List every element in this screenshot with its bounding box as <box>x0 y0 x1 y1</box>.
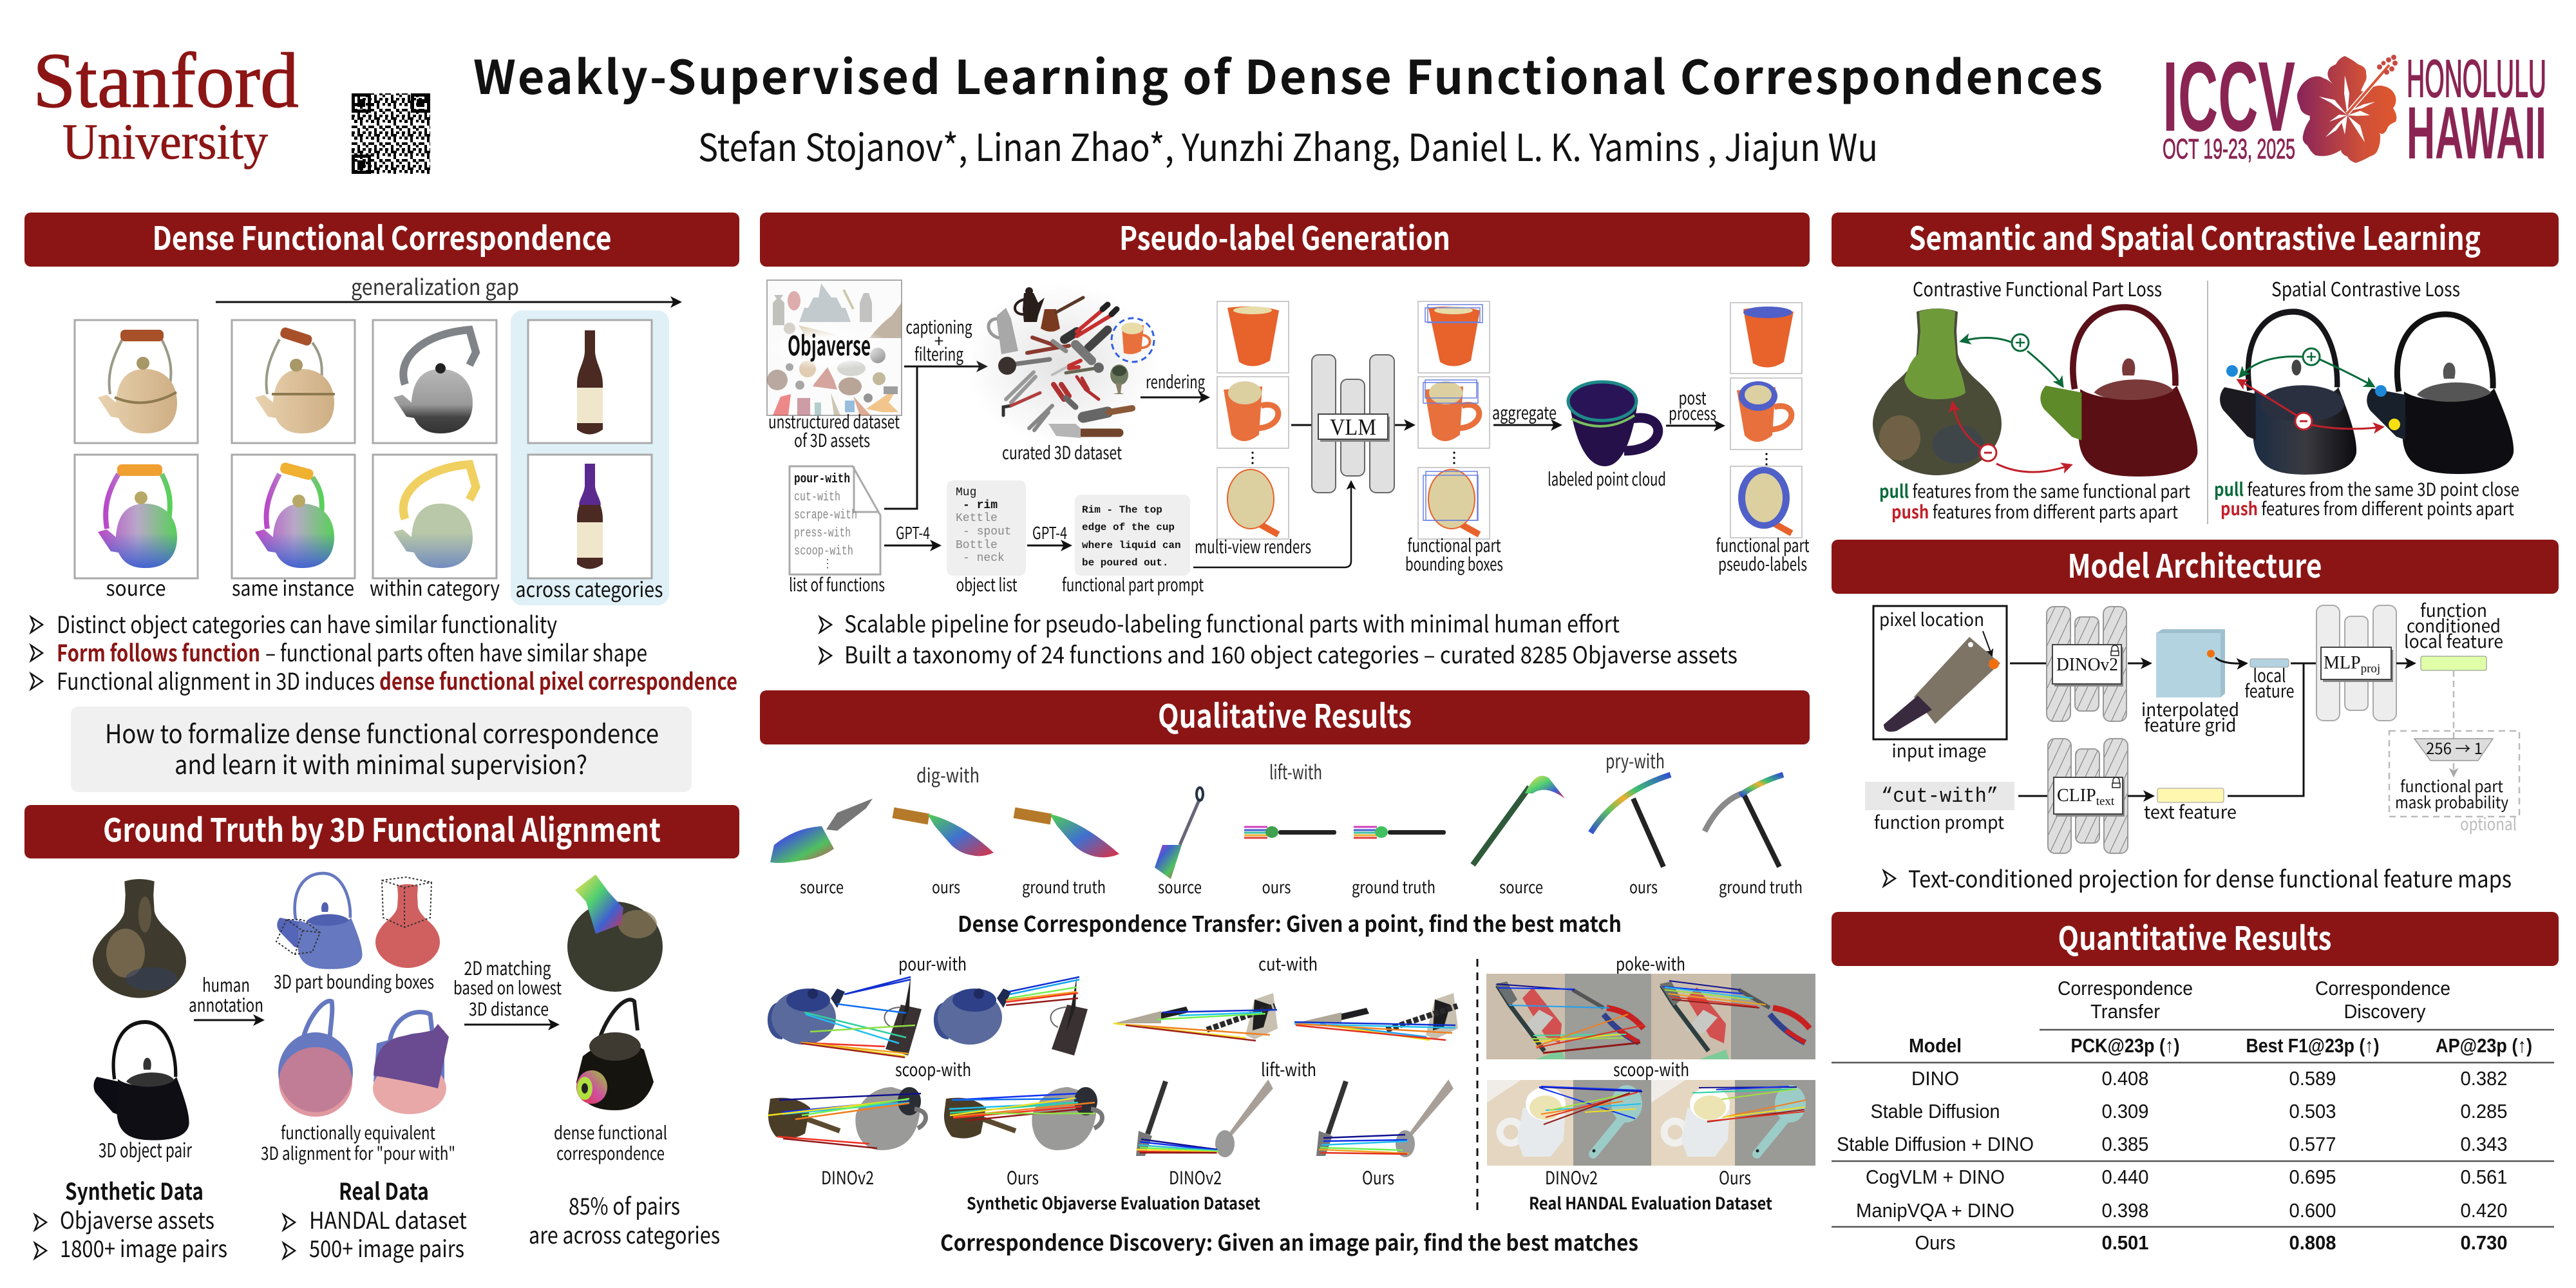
dense transfer: pry-with <box>1473 746 1803 898</box>
captioning and filtering arrow: + <box>934 328 943 352</box>
image column labels <box>106 573 663 603</box>
panel: Ground Truth by 3D Functional Alignment <box>24 805 739 1264</box>
interpolated feature grid: feature grid <box>2145 712 2236 737</box>
MLP projection: MLP <box>2324 653 2361 673</box>
image column labels: across categories <box>515 574 663 603</box>
functional part prompt: be poured out. <box>1082 557 1168 569</box>
results table: 0.503 <box>2289 1100 2336 1122</box>
dataset separator <box>1476 959 1479 1211</box>
dense transfer: pry-with: pry-with <box>1605 746 1665 774</box>
discovery model labels: Ours <box>1362 1164 1394 1190</box>
captioning and filtering arrow: captioning <box>905 314 972 339</box>
85 percent callout: 85% of pairs <box>569 1188 680 1222</box>
real data: HANDAL dataset <box>309 1202 467 1236</box>
optional mask head: mask probability <box>2395 790 2508 813</box>
results table: Stable Diffusion <box>1870 1100 2000 1122</box>
question callout <box>71 706 692 792</box>
heading: Pseudo-label Generation <box>1119 213 1450 260</box>
dense transfer: lift-with: lift-with <box>1269 757 1322 785</box>
synthetic data: Objaverse assets <box>60 1202 214 1236</box>
list of functions document: press-with <box>794 526 851 541</box>
spatial contrastive loss <box>2214 274 2519 521</box>
object list: - rim <box>963 499 998 512</box>
Objaverse collage: Objaverse <box>788 325 871 364</box>
label: unstructured dataset: unstructured dataset <box>768 408 900 434</box>
panel: Qualitative Results <box>760 690 1815 1257</box>
discovery: lift-with <box>1136 1056 1452 1157</box>
real pair: scoop-with: scoop-with <box>1613 1056 1689 1082</box>
dataset labels <box>967 1191 1772 1215</box>
image column labels: within category <box>370 573 500 602</box>
heading <box>1832 540 2559 594</box>
discovery model labels: Ours <box>1719 1164 1751 1190</box>
results table: 0.309 <box>2102 1100 2148 1122</box>
bullet list: – functional parts often have similar shape <box>265 635 647 668</box>
results table: 0.440 <box>2102 1166 2148 1188</box>
discovery: cut-with: cut-with <box>1258 951 1318 976</box>
list of functions document: scoop-with <box>794 544 853 559</box>
panel: Semantic and Spatial Contrastive Learning <box>1832 213 2559 524</box>
ICCV logo: OCT 19-23, 2025 <box>2163 133 2295 165</box>
bullet list: dense functional pixel correspondence <box>379 663 737 697</box>
real pair: scoop-with <box>1487 1056 1815 1166</box>
curated 3D dataset tools: curated 3D dataset <box>1002 439 1122 465</box>
prompt to VLM arrow <box>1193 482 1351 567</box>
contrastive functional part loss: push features from different parts apart <box>1891 498 2178 524</box>
CLIP text encoder <box>2018 739 2128 853</box>
object list: - spout <box>963 526 1012 538</box>
list of functions document: ⋮ <box>822 554 833 571</box>
results table: 0.501 <box>2102 1231 2148 1254</box>
generalization gap arrow: generalization gap <box>351 270 519 301</box>
contrastive functional part loss: pull features from the same functional part <box>1879 478 2190 504</box>
spatial contrastive loss: Spatial Contrastive Loss <box>2271 274 2460 302</box>
Stanford University logo <box>33 37 299 169</box>
multi-view renders <box>1195 301 1311 559</box>
3D object pair: 3D object pair <box>99 1135 192 1163</box>
bullets: Scalable pipeline for pseudo-labeling functional parts with minimal human effort <box>844 606 1620 639</box>
functionally equivalent 3D alignment: 3D alignment for "pour with" <box>261 1140 455 1166</box>
dense transfer: lift-with: ours <box>1262 875 1291 898</box>
functional part pseudo-labels: pseudo-labels <box>1718 551 1807 576</box>
captioning and filtering arrow <box>884 314 986 509</box>
results table: 0.561 <box>2460 1166 2508 1188</box>
dataset labels: Real HANDAL Evaluation Dataset <box>1529 1191 1772 1215</box>
local feature <box>2245 659 2294 703</box>
results table: AP@23p (↑) <box>2436 1034 2532 1057</box>
panel: Model Architecture <box>1832 540 2559 895</box>
function conditioned local feature: function <box>2420 597 2487 623</box>
bullet list: Distinct object categories can have similar functionality <box>57 607 557 640</box>
bullet: Text-conditioned projection for dense functional feature maps <box>1908 861 2512 895</box>
results table: 0.695 <box>2289 1166 2336 1188</box>
2D matching arrow <box>453 954 562 1025</box>
real data <box>283 1173 467 1264</box>
image column labels: same instance <box>232 573 354 602</box>
panel: Quantitative Results <box>1832 912 2559 1254</box>
QR code <box>352 93 430 174</box>
function conditioned local feature: local feature <box>2404 628 2503 654</box>
results table: PCK@23p (↑) <box>2071 1034 2179 1057</box>
subheading: dense correspondence transfer: Dense Correspondence Transfer: Given a point, find the best match <box>958 907 1622 938</box>
results table: 0.285 <box>2460 1100 2508 1122</box>
panel: Dense Functional Correspondence <box>24 213 739 792</box>
human annotation arrow <box>189 971 263 1020</box>
interpolated feature grid <box>2128 629 2246 737</box>
object list: Bottle <box>956 539 998 552</box>
dense transfer: dig-with: ours <box>932 875 960 898</box>
discovery: cut-with <box>1113 951 1458 1041</box>
real pair: poke-with <box>1486 951 1815 1059</box>
across categories highlight <box>511 310 669 605</box>
VLM network: VLM <box>1330 414 1376 440</box>
object list: - neck <box>963 552 1005 565</box>
object list: Mug <box>956 486 976 499</box>
post process arrow: process <box>1669 400 1716 426</box>
text feature: text feature <box>2144 799 2237 824</box>
VLM network <box>1291 355 1414 493</box>
2D matching arrow: 2D matching <box>464 954 551 981</box>
function prompt: function prompt <box>1874 809 2004 835</box>
ICCV logo: ICCV <box>2163 41 2295 152</box>
functional part bounding boxes <box>1405 301 1503 576</box>
human annotation arrow: annotation <box>189 990 263 1018</box>
input image <box>1873 606 2007 763</box>
bullet list <box>31 607 737 697</box>
authors: Stefan Stojanov*, Linan Zhao*, Yunzhi Zhang, Daniel L. K. Yamins , Jiajun Wu <box>698 118 1878 172</box>
optional mask head: functional part <box>2400 774 2504 797</box>
3D object pair <box>93 879 192 1163</box>
label: unstructured dataset: of 3D assets <box>794 427 870 453</box>
discovery: pour-with: pour-with <box>898 951 967 976</box>
dense transfer: pry-with: ours <box>1629 875 1658 898</box>
discovery model labels: DINOv2 <box>1169 1164 1222 1190</box>
function prompt <box>1865 782 2014 835</box>
list of functions document: pour-with <box>794 472 850 487</box>
local feature: feature <box>2245 677 2294 703</box>
list of functions document: list of functions <box>789 571 885 597</box>
results table: Correspondence <box>2315 977 2450 999</box>
bullet list: Form follows function <box>57 635 260 668</box>
post process arrow: post <box>1678 384 1707 410</box>
functional part prompt: where liquid can <box>1082 540 1181 551</box>
object list: object list <box>956 571 1018 597</box>
heading: Model Architecture <box>2067 541 2322 587</box>
discovery model labels <box>821 1164 1751 1190</box>
MLP projection <box>2316 605 2396 721</box>
feature merge lines <box>2228 663 2316 796</box>
dense transfer: dig-with: source <box>800 875 844 898</box>
labeled point cloud <box>1548 382 1666 491</box>
85 percent callout <box>529 1188 720 1251</box>
discovery model labels: Ours <box>1007 1164 1039 1190</box>
heading <box>760 213 1810 267</box>
discovery: pour-with <box>770 951 1088 1057</box>
discovery: scoop-with <box>768 1056 1103 1150</box>
divider <box>2207 281 2208 524</box>
results table: 0.600 <box>2289 1199 2336 1222</box>
panel: Pseudo-label Generation <box>760 213 1810 670</box>
heading: Ground Truth by 3D Functional Alignment <box>103 805 661 851</box>
DINOv2 encoder <box>2010 607 2126 721</box>
optional mask head <box>2389 670 2519 835</box>
real data: 500+ image pairs <box>309 1231 464 1264</box>
results table: Correspondence <box>2058 977 2193 999</box>
Stanford University logo: University <box>62 113 268 169</box>
heading <box>24 213 739 267</box>
dense transfer: dig-with: ground truth <box>1022 875 1106 898</box>
functional part pseudo-labels <box>1716 303 1810 576</box>
local feature: local <box>2253 662 2286 688</box>
results table: Discovery <box>2344 1000 2426 1023</box>
functional part pseudo-labels: functional part <box>1716 532 1810 558</box>
label: unstructured dataset <box>768 408 900 453</box>
question callout: and learn it with minimal supervision? <box>175 744 587 782</box>
heading: Quantitative Results <box>2058 913 2331 960</box>
multi-view renders: multi-view renders <box>1195 533 1311 559</box>
function prompt: “cut-with” <box>1881 784 1998 808</box>
function conditioned local feature <box>2396 597 2503 670</box>
contrastive functional part loss <box>1873 274 2197 524</box>
rendering arrow: rendering <box>1146 368 1205 394</box>
subheading: correspondence discovery: Correspondence Discovery: Given an image pair, find the best matches <box>940 1226 1638 1257</box>
results table: Model <box>1909 1034 1962 1057</box>
results table: Stable Diffusion + DINO <box>1837 1133 2034 1155</box>
heading <box>1832 912 2559 966</box>
optional mask head: 256 → 1 <box>2426 736 2483 759</box>
GPT-4 arrow two: GPT-4 <box>1032 520 1067 544</box>
2D matching arrow: 3D distance <box>469 996 549 1021</box>
interpolated feature grid: interpolated <box>2141 696 2239 722</box>
dense transfer: lift-with: ground truth <box>1352 875 1435 898</box>
spatial contrastive loss: pull features from the same 3D point close <box>2214 476 2519 502</box>
functional part prompt: functional part prompt <box>1062 571 1204 597</box>
input image: pixel location <box>1879 606 1984 632</box>
list of functions document: scrape-with <box>794 508 857 523</box>
Objaverse collage <box>766 280 902 415</box>
Stanford University logo: Stanford <box>33 37 299 124</box>
3D part bounding boxes: 3D part bounding boxes <box>274 967 434 994</box>
labeled point cloud: labeled point cloud <box>1548 466 1666 491</box>
discovery: scoop-with: scoop-with <box>895 1056 971 1082</box>
results table: Transfer <box>2090 1000 2160 1023</box>
functional part bounding boxes: functional part <box>1408 532 1501 558</box>
image grid: kettles and bottles <box>75 320 652 578</box>
discovery: lift-with: lift-with <box>1261 1056 1316 1082</box>
synthetic data: Synthetic Data <box>65 1173 204 1207</box>
list of functions document: cut-with <box>794 490 840 505</box>
results table: 0.730 <box>2460 1231 2508 1254</box>
synthetic data: 1800+ image pairs <box>60 1231 227 1264</box>
functionally equivalent 3D alignment: functionally equivalent <box>281 1119 435 1145</box>
aggregate arrow: aggregate <box>1492 399 1557 425</box>
ICCV logo <box>2163 41 2546 175</box>
input image: input image <box>1892 737 1986 763</box>
real pair: poke-with: poke-with <box>1616 951 1685 976</box>
heading: Dense Functional Correspondence <box>152 213 612 260</box>
dense transfer: pry-with: ground truth <box>1719 875 1803 898</box>
list of functions document <box>789 466 885 597</box>
discovery model labels: DINOv2 <box>821 1164 874 1190</box>
contrastive functional part loss: Contrastive Functional Part Loss <box>1913 274 2162 302</box>
CLIP text encoder: text <box>2096 795 2115 808</box>
results table: ManipVQA + DINO <box>1856 1199 2014 1222</box>
results table: 0.408 <box>2102 1067 2148 1090</box>
MLP projection: proj <box>2361 662 2380 676</box>
results table: Best F1@23p (↑) <box>2246 1034 2379 1057</box>
spatial contrastive loss: push features from different points apart <box>2221 495 2514 521</box>
rendering arrow <box>1141 368 1208 397</box>
dataset labels: Synthetic Objaverse Evaluation Dataset <box>967 1191 1260 1215</box>
results table: 0.420 <box>2460 1199 2508 1222</box>
dense transfer: pry-with: source <box>1499 875 1543 898</box>
image column labels: source <box>106 573 166 602</box>
functional part prompt: Rim - The top <box>1082 504 1162 516</box>
results table: Ours <box>1915 1231 1955 1254</box>
dense functional correspondence result: correspondence <box>556 1140 665 1166</box>
results table <box>1832 977 2554 1254</box>
results table: 0.808 <box>2289 1231 2336 1254</box>
results table: DINO <box>1911 1067 1959 1090</box>
curated 3D dataset tools <box>966 283 1159 465</box>
results table: 0.382 <box>2460 1067 2508 1090</box>
dense transfer: dig-with: dig-with <box>916 760 980 788</box>
dense functional correspondence result <box>554 875 667 1166</box>
85 percent callout: are across categories <box>529 1217 720 1251</box>
results table: 0.577 <box>2289 1133 2336 1155</box>
function conditioned local feature: conditioned <box>2407 612 2501 638</box>
results table: 0.589 <box>2289 1067 2336 1090</box>
text feature <box>2128 788 2237 824</box>
DINOv2 encoder: DINOv2 <box>2056 655 2118 675</box>
question callout: How to formalize dense functional correspondence <box>105 714 659 751</box>
CLIP text encoder: CLIP <box>2057 786 2096 806</box>
dense transfer: dig-with <box>770 760 1119 898</box>
dense transfer: lift-with: source <box>1158 875 1202 898</box>
2D matching arrow: based on lowest <box>453 974 562 1000</box>
heading: Qualitative Results <box>1158 691 1412 737</box>
bullets <box>820 606 1738 670</box>
results table: CogVLM + DINO <box>1866 1166 2005 1188</box>
captioning and filtering arrow: filtering <box>914 341 963 366</box>
bullet list: Functional alignment in 3D induces <box>57 663 375 697</box>
object list: Kettle <box>956 512 998 525</box>
functional part bounding boxes: bounding boxes <box>1405 551 1503 576</box>
3D part bounding boxes <box>274 873 440 994</box>
bullets: Built a taxonomy of 24 functions and 160 object categories – curated 8285 Objaverse assets <box>844 637 1738 670</box>
synthetic data <box>35 1173 227 1264</box>
functionally equivalent 3D alignment <box>261 1001 455 1166</box>
heading: Semantic and Spatial Contrastive Learning <box>1909 213 2481 260</box>
real data: Real Data <box>339 1173 429 1207</box>
functional part prompt <box>1062 495 1204 597</box>
results table: 0.343 <box>2460 1133 2508 1155</box>
discovery model labels: DINOv2 <box>1545 1164 1598 1190</box>
object list <box>947 480 1026 597</box>
results table: 0.385 <box>2102 1133 2148 1155</box>
dense transfer: lift-with <box>1155 757 1446 898</box>
human annotation arrow: human <box>202 971 250 998</box>
title: Weakly-Supervised Learning of Dense Functional Correspondences <box>473 40 2103 108</box>
results table: 0.398 <box>2102 1199 2148 1222</box>
optional mask head: optional <box>2460 811 2517 835</box>
heading <box>760 690 1810 744</box>
post process arrow <box>1666 384 1723 426</box>
dense functional correspondence result: dense functional <box>554 1119 667 1145</box>
functional part prompt: edge of the cup <box>1082 522 1175 533</box>
GPT-4 arrow one: GPT-4 <box>896 520 930 544</box>
